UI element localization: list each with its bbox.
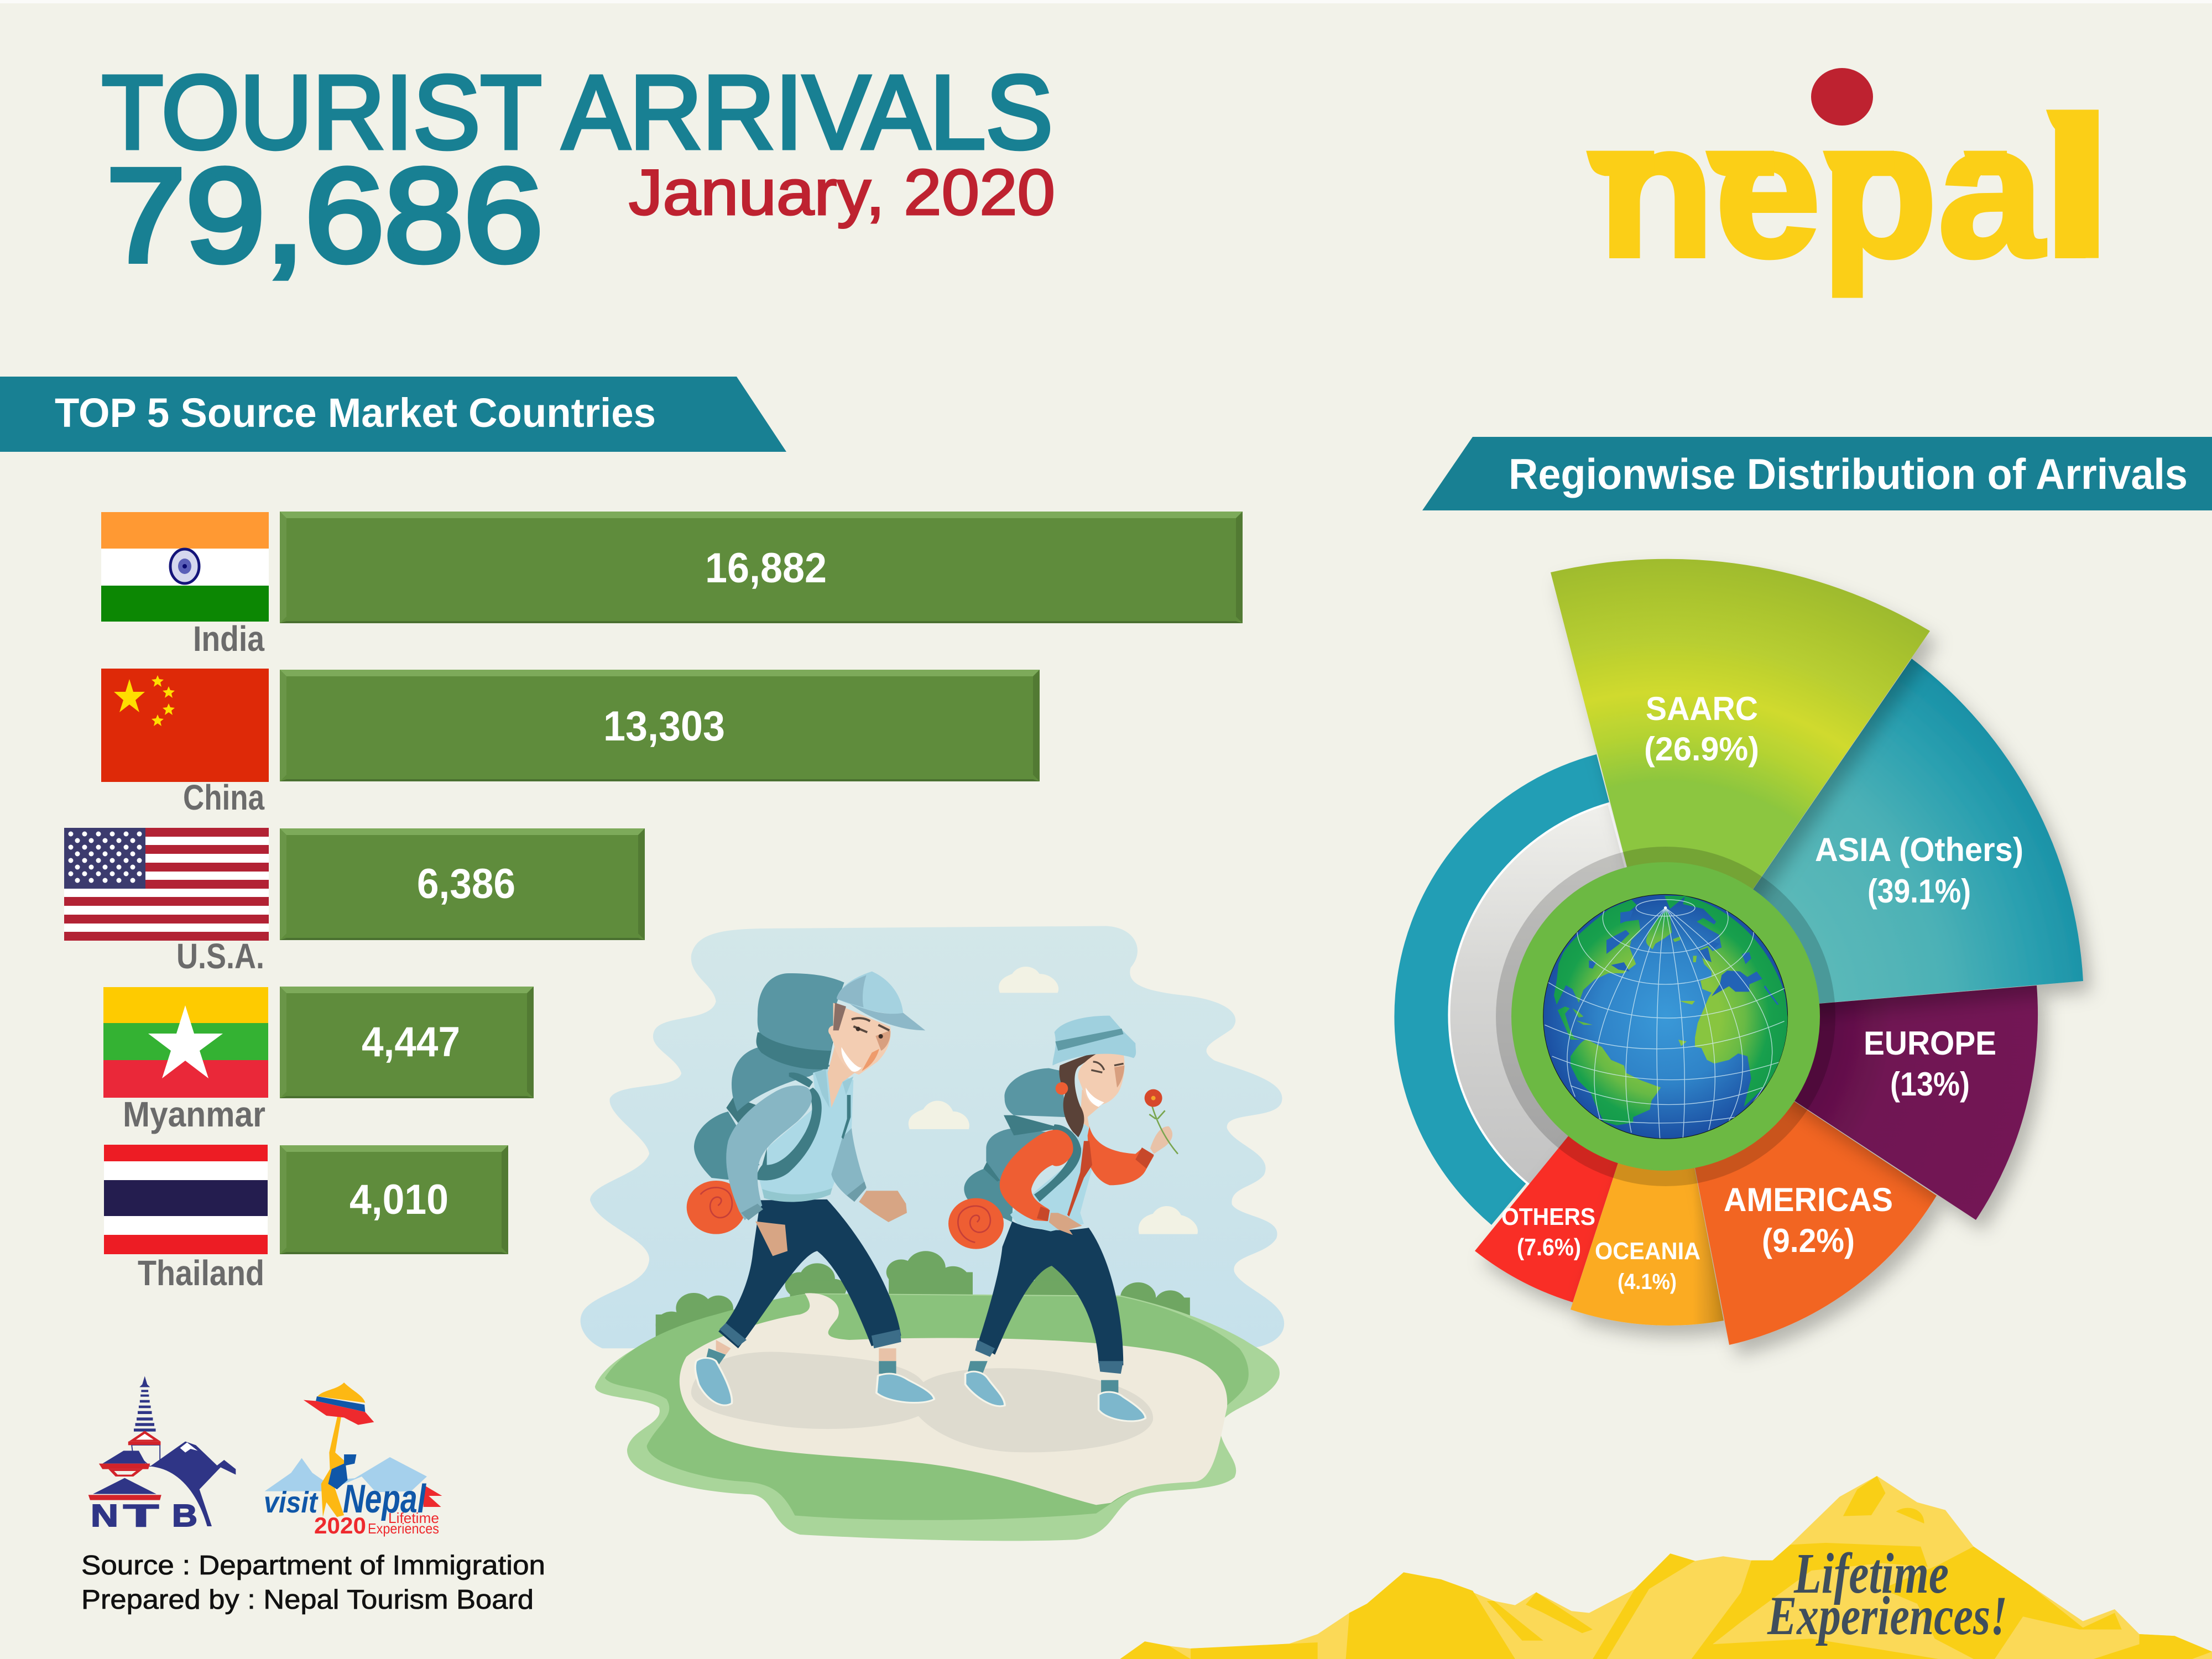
- woman legs: [966, 1222, 1145, 1421]
- icon: globe: [1543, 874, 1788, 1139]
- banner: regionwise distribution: [1422, 437, 2212, 510]
- label: americas: [1724, 1181, 1893, 1259]
- label: saarc: [1644, 690, 1759, 768]
- chart: regionwise distribution pie: [1394, 559, 2083, 1345]
- clouds: [909, 967, 1198, 1234]
- label: europe: (13%): [1890, 1066, 1970, 1103]
- label: USA: U.S.A.: [176, 936, 264, 976]
- logo: NTB: [88, 1376, 236, 1533]
- segment: saarc: [1551, 559, 1930, 1016]
- segment: europe: [1666, 985, 2038, 1220]
- value: 4,010: [349, 1176, 448, 1223]
- flag: India: [101, 512, 269, 622]
- banner heading: TOP 5 Source Market Countries: [55, 390, 656, 436]
- path: [680, 1293, 1227, 1505]
- hub green ring: [1511, 862, 1820, 1171]
- label: India: India: [193, 619, 264, 659]
- flag: China: [101, 669, 269, 782]
- label: europe: [1864, 1025, 1996, 1103]
- segment: others: [1475, 1016, 1666, 1302]
- icon: red tika thumbprint: [1811, 68, 1873, 126]
- man legs: [695, 1199, 934, 1405]
- label: others: [1501, 1203, 1595, 1261]
- visit text: visit: [264, 1486, 319, 1519]
- nepal logo: [1586, 68, 2099, 298]
- label: others: OTHERS: [1501, 1203, 1595, 1230]
- logo: visit Nepal 2020: [264, 1383, 442, 1538]
- hiker shadows: [691, 1352, 1153, 1452]
- sky blob: [581, 926, 1284, 1348]
- illustration: two hikers: [581, 926, 1284, 1541]
- value: 6,386: [417, 860, 515, 907]
- bar: Myanmar: [280, 987, 534, 1098]
- date: January, 2020: [629, 156, 1055, 228]
- NTB letters: N: [91, 1498, 118, 1533]
- label: americas: AMERICAS: [1724, 1181, 1893, 1218]
- flag: Myanmar: [103, 987, 268, 1098]
- label: europe: EUROPE: [1864, 1025, 1996, 1062]
- ground inner: [605, 1294, 1249, 1520]
- flag: Thailand: [104, 1145, 268, 1254]
- bar: China: [280, 670, 1040, 781]
- label: others: (7.6%): [1517, 1234, 1581, 1261]
- logo wordmark: nepal: [1598, 84, 2097, 298]
- banner: top 5 source markets: [0, 377, 786, 452]
- hub shadow ring: [1496, 847, 1835, 1186]
- NTB letters: T: [123, 1498, 159, 1533]
- segment: asia others: [1666, 659, 2083, 1016]
- segment: americas: [1666, 1016, 1937, 1345]
- NTB letters: [91, 1498, 197, 1533]
- bar: Thailand: [280, 1145, 508, 1254]
- flag: USA: [64, 828, 269, 941]
- label: Myanmar: Myanmar: [123, 1094, 265, 1134]
- grid lines: [1545, 874, 1785, 1138]
- man upper body: [687, 972, 925, 1234]
- banner heading: Regionwise Distribution of Arrivals: [1509, 450, 2188, 498]
- NTB letters: B: [172, 1498, 197, 1533]
- segment: oceania: [1571, 1016, 1724, 1326]
- tagline: experiences: Experiences!: [1767, 1585, 2007, 1646]
- total arrivals number: 79,686: [106, 141, 543, 289]
- label: China: China: [183, 778, 264, 817]
- Lifetime text: Lifetime: [388, 1510, 439, 1526]
- label: Thailand: Thailand: [138, 1253, 264, 1293]
- ground outer: [595, 1293, 1280, 1541]
- continents: [1554, 896, 1788, 1125]
- title: tourist arrivals: TOURIST ARRIVALS: [102, 54, 1053, 171]
- label: saarc: (26.9%): [1644, 731, 1759, 768]
- label: oceania: [1595, 1238, 1700, 1294]
- bar: USA: [280, 828, 645, 940]
- label: oceania: OCEANIA: [1595, 1238, 1700, 1265]
- bushes: [656, 1251, 1190, 1340]
- tagline: lifetime: Lifetime: [1793, 1542, 1949, 1605]
- woman upper body: [948, 1016, 1178, 1249]
- label: asia: ASIA (Others): [1815, 831, 2023, 868]
- Experiences text: Experiences: [368, 1520, 439, 1537]
- outer teal ring: [1394, 754, 1666, 1225]
- label: asia: (39.1%): [1867, 873, 1971, 910]
- label: oceania: (4.1%): [1618, 1270, 1677, 1294]
- seas and bays: [1589, 911, 1779, 1005]
- label: saarc: SAARC: [1646, 690, 1758, 727]
- label: asia: [1815, 831, 2023, 910]
- value: 4,447: [362, 1019, 460, 1066]
- grey inner disc: [1449, 804, 1666, 1186]
- bar: India: [280, 512, 1243, 623]
- bar chart: top 5 countries: [280, 512, 1243, 1254]
- 2020 text: 2020: [314, 1512, 366, 1538]
- source line: Source : Department of Immigration: [81, 1551, 545, 1580]
- Nepal text: Nepal: [343, 1477, 427, 1521]
- label: americas: (9.2%): [1762, 1222, 1855, 1259]
- prepared by line: Prepared by : Nepal Tourism Board: [81, 1585, 534, 1615]
- mountain graphic: [1120, 1476, 2212, 1659]
- value: 13,303: [603, 703, 725, 750]
- value: 16,882: [705, 545, 827, 592]
